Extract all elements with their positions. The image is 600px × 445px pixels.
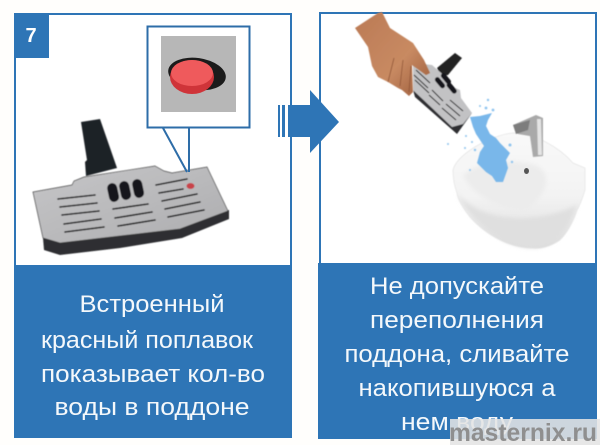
icon: sink: [453, 133, 585, 248]
text block: right caption: накопившуюся а: [358, 375, 556, 402]
text block: right caption: нем воду: [401, 409, 513, 436]
text block: left caption: Встроенный: [80, 291, 224, 318]
text block: right caption: [318, 263, 597, 439]
text block: right caption: переполнения: [370, 307, 544, 334]
step number badge: [14, 13, 49, 58]
panel: right step: [318, 12, 597, 439]
icon: water splash: [447, 99, 513, 182]
text block: left caption: воды в поддоне: [54, 394, 250, 421]
step number badge: 7: [25, 25, 37, 47]
text block: left caption: [14, 265, 292, 438]
text block: right caption: Не допускайте: [370, 273, 544, 300]
text block: left caption: показывает кол-во: [41, 361, 265, 388]
arrow: left to right: [278, 90, 339, 153]
text block: right caption: поддона, сливайте: [344, 341, 570, 368]
icon: hand: [355, 12, 430, 96]
icon: drip tray: [33, 119, 229, 255]
right image frame: [320, 13, 596, 267]
icon: faucet: [513, 115, 543, 157]
panel: left step: [14, 13, 292, 438]
left image frame: [15, 14, 291, 268]
text block: left caption: красный поплавок: [41, 327, 254, 354]
callout: red float close-up: [148, 26, 250, 172]
icon: tray tilted: [413, 53, 472, 134]
